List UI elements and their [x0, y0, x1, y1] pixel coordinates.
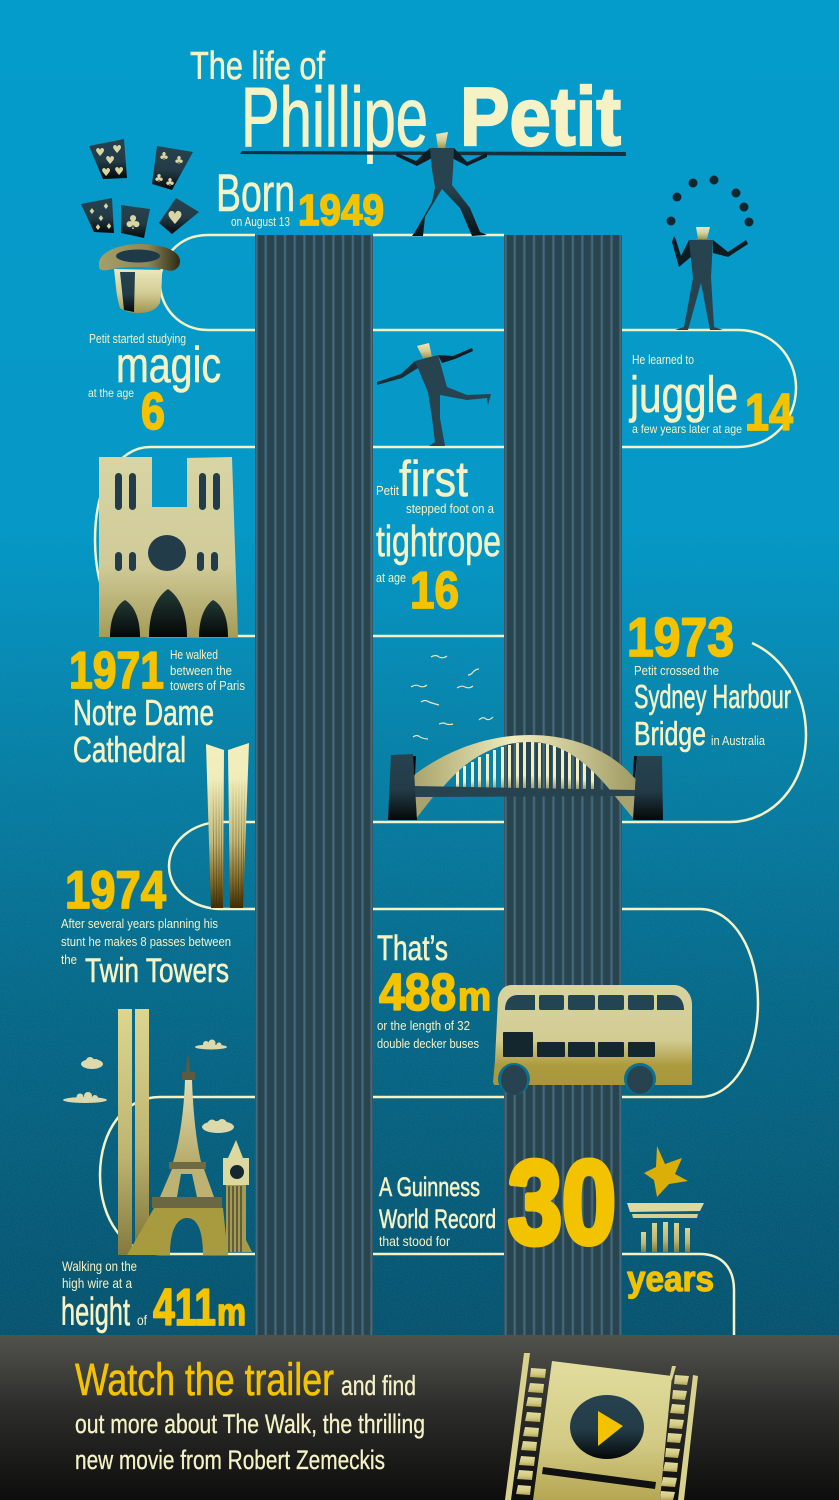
text: first tightrope	[376, 451, 501, 620]
text: height 411m: of	[137, 1312, 147, 1328]
text: height 411m: high wire at a	[62, 1275, 132, 1291]
text: Notre Dame 1971	[69, 642, 245, 770]
text: 488m: or the length of 32	[377, 1018, 470, 1033]
text: Sydney 1973: Bridge	[634, 715, 706, 752]
icon: clouds	[63, 1040, 234, 1133]
text: Twin Towers 1974: Twin Towers	[85, 952, 229, 990]
title: The life of	[190, 45, 325, 88]
text: height 411m	[61, 1258, 246, 1337]
icon: star and plinth	[627, 1146, 704, 1252]
text: first tightrope: 16	[410, 562, 459, 620]
icon: film strip with play button	[505, 1353, 698, 1500]
icon: playing cards: ♣	[124, 212, 142, 234]
text: first tightrope: Petit	[376, 483, 399, 498]
icon: playing cards	[81, 139, 199, 238]
icon: magician hat	[99, 244, 180, 313]
text: Sydney 1973: Petit crossed the	[634, 663, 719, 678]
text: juggle	[628, 352, 793, 442]
text: magic: magic	[116, 337, 221, 393]
icon: Notre Dame	[99, 457, 238, 637]
text: Sydney 1973	[627, 606, 791, 752]
text: first tightrope: at age	[376, 570, 406, 585]
icon: playing cards: ♣	[165, 176, 175, 189]
born text: Born	[216, 164, 295, 223]
icon: birds	[411, 656, 493, 739]
icon: Sydney Harbour Bridge	[388, 735, 663, 820]
text: 488m: m	[458, 975, 491, 1019]
born text	[216, 164, 384, 235]
text: height 411m: Walking on the	[62, 1258, 137, 1274]
born text: on August 13	[231, 214, 290, 229]
text: Guinness World Record: that stood for	[379, 1233, 450, 1249]
text: Notre Dame 1971: Notre Dame	[73, 692, 214, 733]
text: Notre Dame 1971: between the	[170, 663, 232, 678]
born text: 1949	[298, 186, 384, 235]
text: height 411m: height	[61, 1291, 130, 1334]
figure: juggler	[672, 227, 748, 330]
title: Phillipe	[241, 70, 428, 164]
text: magic	[88, 331, 221, 441]
footer text: and find	[341, 1370, 416, 1401]
icon: playing cards: ♦	[94, 223, 102, 232]
icon: playing cards: ♥	[114, 165, 124, 178]
footer text	[75, 1354, 425, 1475]
text: Twin Towers 1974: the	[61, 952, 77, 967]
icon: juggling balls	[666, 176, 754, 226]
text: height 411m: m	[217, 1292, 246, 1334]
icon: playing cards: ♥	[167, 208, 183, 229]
text: Twin Towers 1974: 1974	[65, 861, 166, 920]
text: Notre Dame 1971: He walked	[170, 647, 218, 662]
icon: playing cards: ♦	[105, 222, 113, 231]
icon: playing cards: ♥	[112, 143, 122, 156]
figure: Petit on one leg	[377, 343, 491, 446]
text: 488m	[377, 929, 491, 1051]
icon: playing cards: ♦	[88, 207, 96, 216]
balancing pole	[240, 151, 626, 156]
icon: playing cards: ♣	[154, 172, 164, 185]
text: Sydney 1973: in Australia	[711, 733, 766, 748]
icon: twin towers	[206, 743, 249, 908]
icon: playing cards: ♥	[101, 166, 111, 179]
text: 488m: double decker buses	[377, 1036, 479, 1051]
footer text: Watch the trailer	[75, 1354, 334, 1405]
icon: playing cards: ♦	[97, 214, 105, 223]
text: Notre Dame 1971: Cathedral	[73, 729, 186, 770]
text: Notre Dame 1971: 1971	[69, 642, 164, 700]
text: juggle: 14	[745, 384, 793, 442]
text: Sydney 1973: 1973	[627, 606, 734, 668]
icon: playing cards: ♥	[95, 146, 105, 159]
text: magic: Petit started studying	[89, 331, 186, 346]
text: juggle: He learned to	[632, 352, 694, 367]
text: magic: 6	[141, 383, 165, 441]
icon: playing cards: ♦	[102, 202, 110, 211]
text: 488m: 488	[379, 964, 456, 1022]
text: 488m: That’s	[377, 929, 448, 968]
text: Guinness World Record: World Record	[379, 1204, 496, 1234]
text: first tightrope: first	[399, 451, 468, 507]
text: juggle: juggle	[628, 366, 738, 423]
text: Guinness World Record: A Guinness	[379, 1172, 480, 1202]
text: magic: at the age	[88, 386, 134, 400]
text: Twin Towers 1974: After several years planning his	[61, 916, 218, 931]
text: juggle: a few years later at age	[632, 422, 742, 436]
text: Twin Towers 1974: stunt he makes 8 passes between	[61, 934, 231, 949]
icon: playing cards: ♣	[174, 154, 184, 167]
icon: double decker bus	[493, 985, 692, 1095]
tower left	[255, 235, 373, 1335]
text: first tightrope: stepped foot on a	[406, 501, 495, 516]
text: Guinness World Record	[379, 1137, 714, 1299]
footer text: new movie from Robert Zemeckis	[75, 1445, 385, 1475]
icon: towers, Eiffel and Big Ben	[118, 1009, 252, 1255]
text: Guinness World Record: 30	[508, 1137, 616, 1269]
footer text: out more about The Walk, the thrilling	[75, 1409, 425, 1439]
tower right	[504, 235, 622, 1335]
title	[190, 45, 621, 164]
wire path	[95, 235, 806, 1335]
title: Petit	[460, 70, 621, 163]
text: first tightrope: tightrope	[376, 517, 501, 566]
text: height 411m: 411	[153, 1279, 216, 1337]
footer panel	[0, 1335, 839, 1500]
icon: playing cards: ♥	[105, 154, 115, 167]
text: Guinness World Record: years	[627, 1258, 714, 1299]
text: Twin Towers 1974	[61, 861, 231, 990]
figure: Petit on wire	[396, 132, 487, 236]
text: Notre Dame 1971: towers of Paris	[170, 678, 245, 693]
icon: playing cards: ♣	[159, 150, 169, 163]
